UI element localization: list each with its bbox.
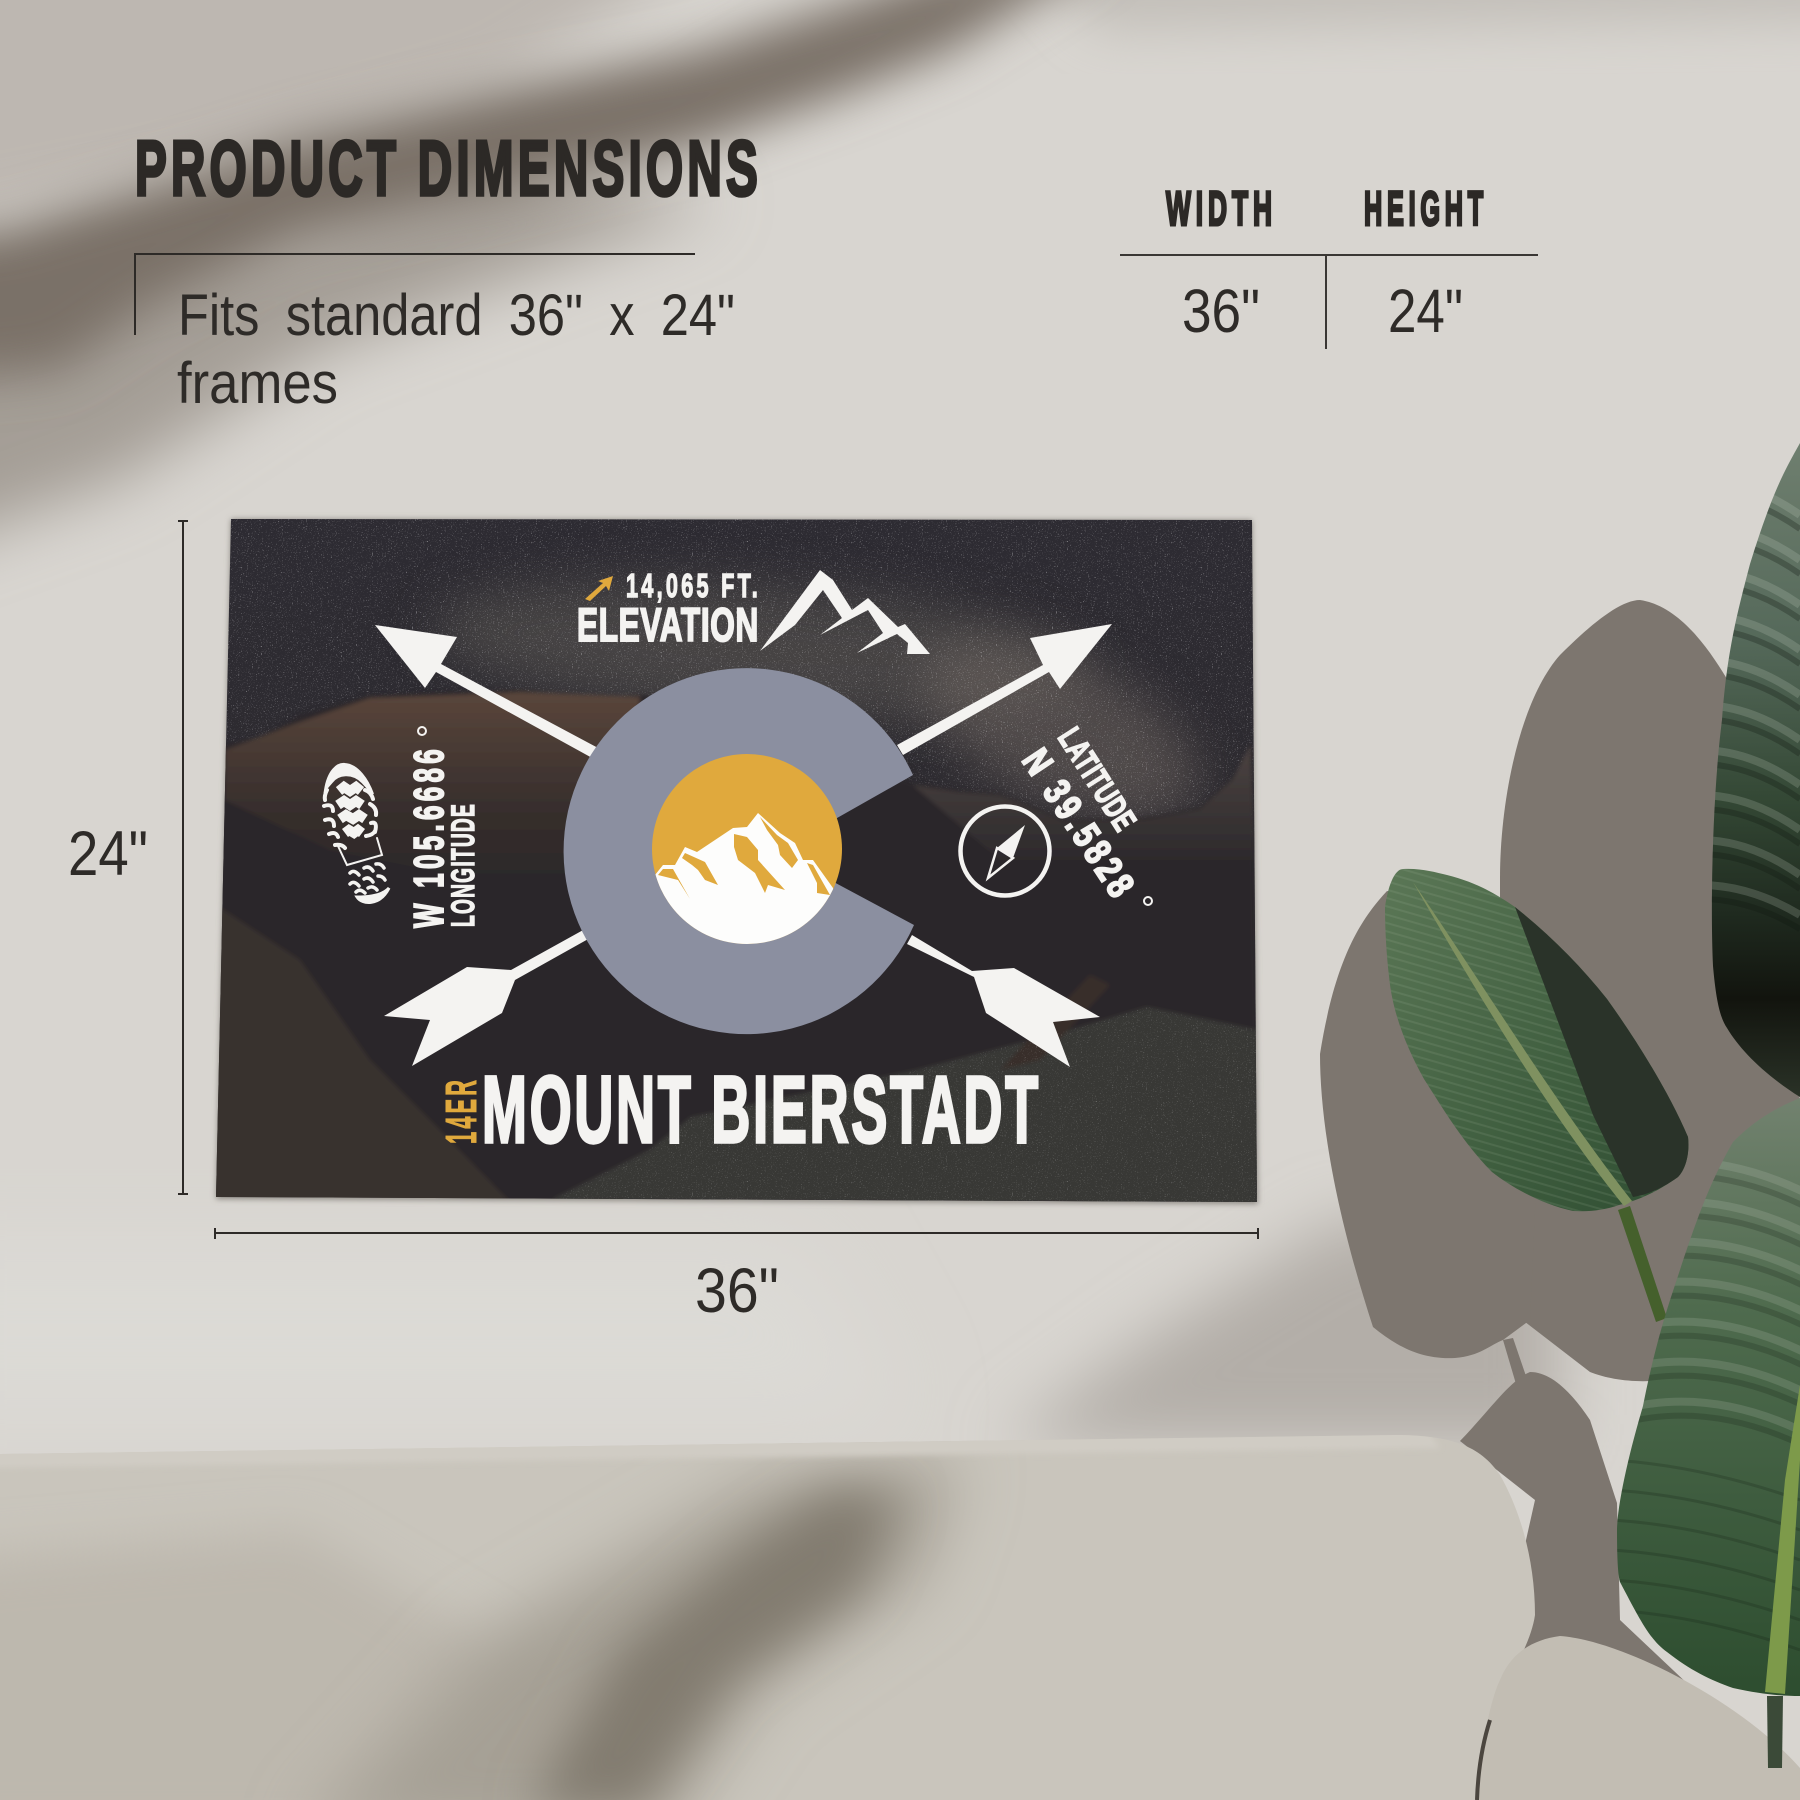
latitude text: N 39.5828 [1014,742,1144,908]
panel: fit description: Fits standard 36" x 24" [178,283,735,348]
latitude text [1014,721,1152,908]
poster title: mount bierstadt [437,1057,1041,1163]
colorado C emblem [564,668,914,1034]
right cushion [1478,1636,1800,1800]
table: width and height: 36" [1182,277,1260,345]
elevation block [577,567,761,651]
icon: amber rising arrow [585,576,613,601]
sun disc with mountain [652,754,842,944]
sofa [0,1420,1800,1800]
poster photo background [210,515,1265,1210]
arrow: upper left [375,625,600,759]
icon: mountain outline [760,570,930,654]
dimension: poster height: 24" [68,819,148,889]
table: width and height: 24" [1388,277,1463,345]
elevation block: 14,065 FT. [626,567,761,604]
leaf: upper right [1712,443,1800,1097]
leaf: lower right [1610,1098,1800,1696]
dimension: poster height [68,521,188,1194]
icon: boot print [324,764,389,902]
leaf ribbing [1610,1162,1800,1650]
poster title: mount bierstadt: MOUNT BIERSTADT [482,1057,1041,1163]
table: width and height [1120,183,1538,349]
longitude text: LONGITUDE [445,803,481,927]
plant shadow on wall [1320,600,1800,1790]
plant stems [1618,1206,1783,1768]
dimension: poster width [215,1228,1258,1326]
table: width and height: WIDTH [1166,183,1277,236]
poster [210,515,1265,1210]
leaf shaded half [1515,907,1688,1197]
dimension: poster width: 36" [695,1256,779,1326]
arrow: lower right fletching [907,935,1100,1067]
leaf rib [1765,1385,1800,1694]
leaf midrib [1413,882,1632,1206]
leaf ribbing [1712,495,1800,918]
poster title: mount bierstadt: 14ER [437,1077,486,1144]
panel: fit description: frames [177,351,338,416]
arrow: lower left fletching [384,929,590,1066]
latitude text: LATITUDE [1051,721,1144,838]
icon: compass [960,806,1050,896]
longitude text [405,727,481,928]
table: width and height: HEIGHT [1364,183,1488,236]
heading: product dimensions: PRODUCT DIMENSIONS [135,124,762,212]
longitude text: W 105.6686 [405,745,452,928]
leaf: centre [1385,869,1688,1211]
elevation block: ELEVATION [577,598,759,651]
arrow: upper right [897,624,1112,755]
panel: fit description [135,254,735,416]
